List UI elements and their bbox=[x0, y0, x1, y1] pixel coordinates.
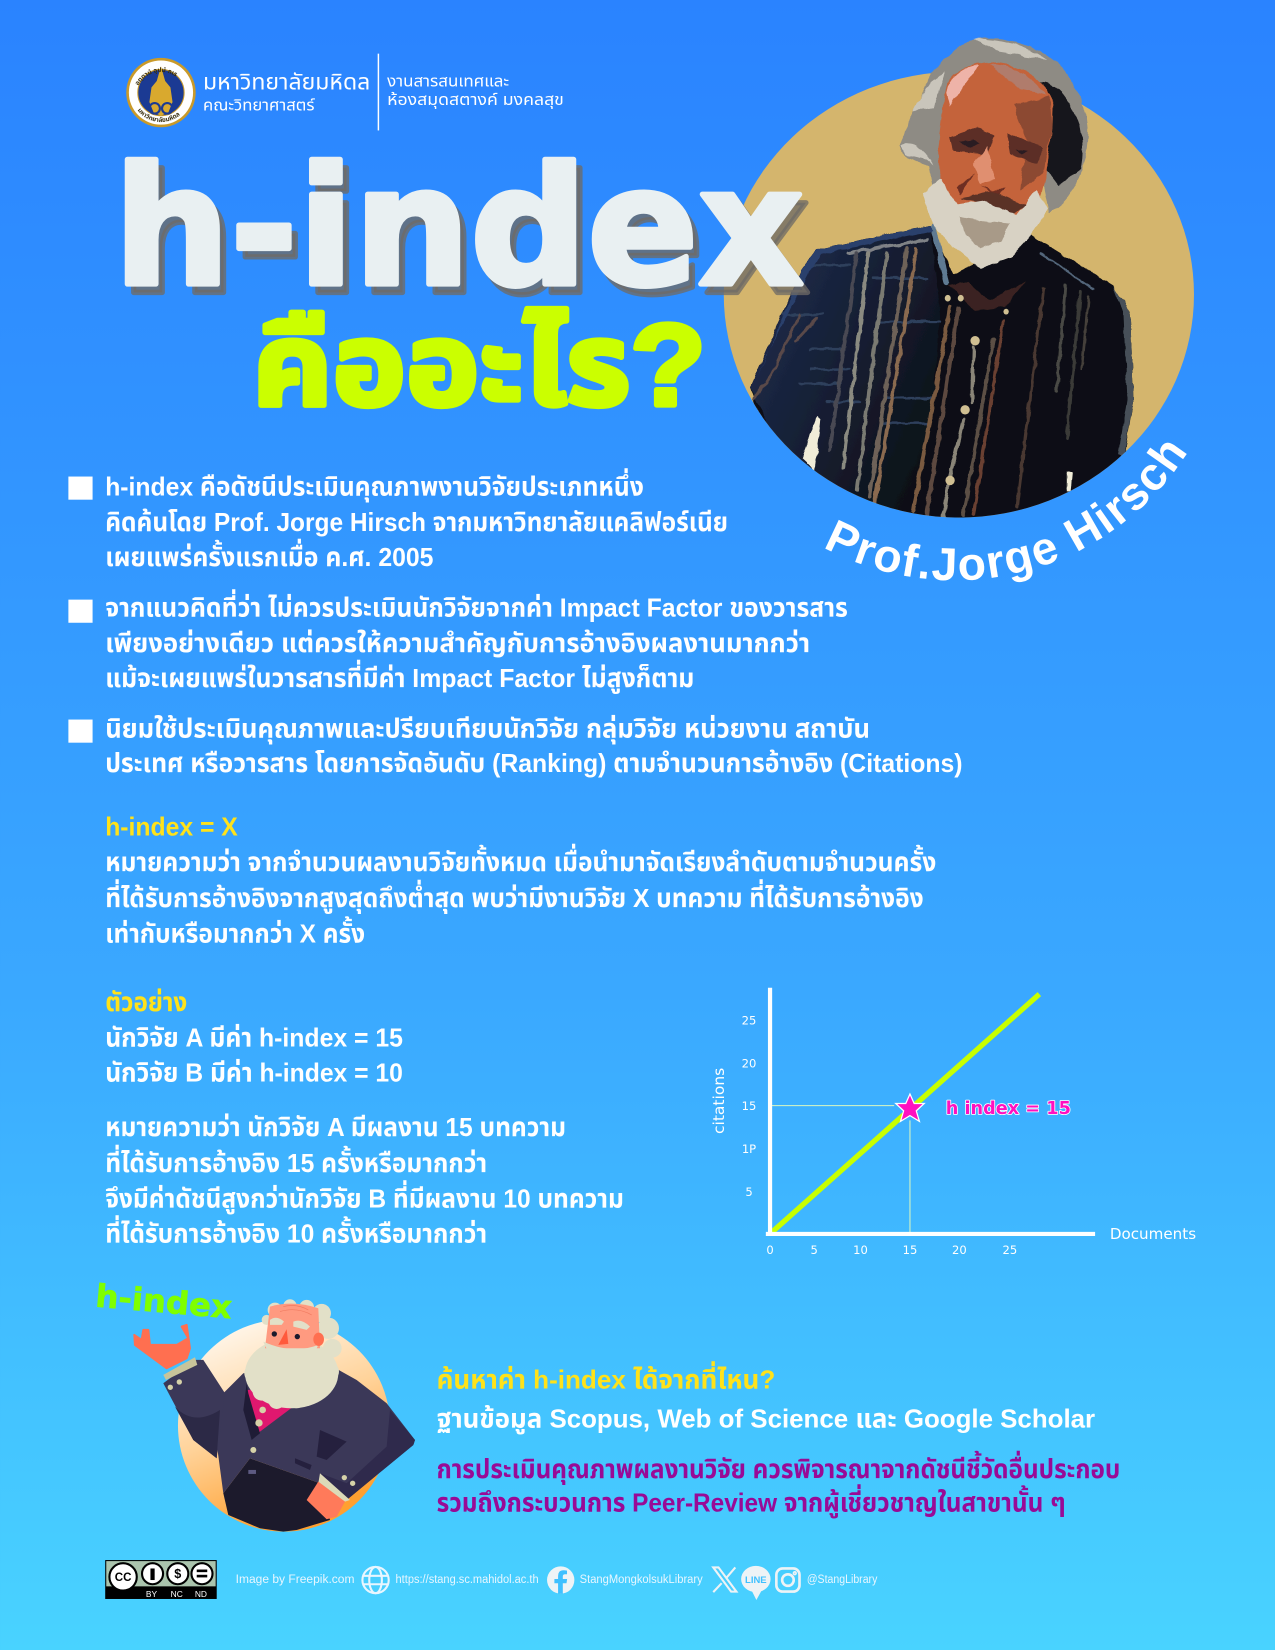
portrait circle background bbox=[724, 72, 1194, 518]
curved name: Prof.Jorge Hirsch: Prof.Jorge Hirsch bbox=[825, 442, 1187, 582]
icon: facebook bbox=[547, 1566, 574, 1594]
text block: where to find h-index bbox=[437, 1360, 1095, 1435]
icon: Instagram bbox=[776, 1568, 800, 1592]
chart: h-index line chart: 10 bbox=[853, 1243, 868, 1257]
icon: CC BY-NC-ND license: $ bbox=[174, 1567, 181, 1581]
icon: star marker bbox=[896, 1094, 924, 1121]
icon: CC BY-NC-ND license bbox=[105, 1560, 217, 1599]
text block: bullet 2 bbox=[68, 588, 848, 694]
header: library name: ห้องสมุดสตางค์ มงคลสุข bbox=[387, 92, 564, 109]
callout: evaluation note: การประเมินคุณภาพผลงานวิจัย ควรพิจารณาจากดัชนีชี้วัดอื่นประกอบ bbox=[437, 1450, 1120, 1485]
chart: h-index line chart: 5 bbox=[811, 1243, 818, 1257]
chart: h-index line chart: 15 bbox=[742, 1099, 756, 1113]
logo: Mahidol University seal: อตฺตานํ อุปมํ กเร bbox=[136, 67, 178, 85]
title: h-index: h-index bbox=[114, 132, 804, 323]
text block: where to find h-index: ค้นหาค่า h-index ได้จากที่ไหน? bbox=[437, 1360, 775, 1395]
chart: h-index line chart bbox=[711, 988, 1196, 1257]
text block: example: นักวิจัย A มีค่า h-index = 15 bbox=[105, 1023, 403, 1053]
text block: example: ที่ได้รับการอ้างอิง 10 ครั้งหรือมากกว่า bbox=[105, 1214, 487, 1248]
footer: website: https://stang.sc.mahidol.ac.th bbox=[396, 1574, 539, 1586]
header: university name bbox=[203, 69, 370, 114]
label: h-index above hand: h-index bbox=[94, 1279, 233, 1326]
callout: evaluation note: รวมถึงกระบวนการ Peer-Review จากผู้เชี่ยวชาญในสาขานั้น ๆ bbox=[437, 1484, 1066, 1519]
text block: h-index = X definition: h-index = X bbox=[105, 811, 238, 841]
callout: evaluation note bbox=[437, 1450, 1120, 1519]
chart: h-index line chart: 25 bbox=[1003, 1243, 1017, 1257]
text block: example: ตัวอย่าง bbox=[105, 987, 187, 1017]
portrait: Prof. Jorge Hirsch bbox=[750, 39, 1133, 565]
text block: h-index = X definition: หมายความว่า จากจำนวนผลงานวิจัยทั้งหมด เมื่อนำมาจัดเรียงลำดับตามจำนวนครั้ง bbox=[105, 843, 936, 877]
text block: example: จึงมีค่าดัชนีสูงกว่านักวิจัย B ที่มีผลงาน 10 บทความ bbox=[105, 1180, 624, 1215]
chart: h-index line chart: 20 bbox=[952, 1243, 967, 1257]
icon: CC BY-NC-ND license: CC bbox=[115, 1572, 132, 1584]
logo: Mahidol University seal bbox=[126, 58, 196, 128]
text block: bullet 1 bbox=[68, 467, 728, 572]
text block: example: หมายความว่า นักวิจัย A มีผลงาน 15 บทความ bbox=[105, 1112, 566, 1142]
chart: h-index line chart: 25 bbox=[742, 1014, 756, 1028]
header: library name: งานสารสนเทศและ bbox=[387, 73, 509, 90]
text block: bullet 2: จากแนวคิดที่ว่า ไม่ควรประเมินนักวิจัยจากค่า Impact Factor ของวารสาร bbox=[105, 588, 848, 622]
chart: h-index line chart: citations bbox=[711, 1068, 728, 1134]
text block: bullet 3: ประเทศ หรือวารสาร โดยการจัดอันดับ (Ranking) ตามจำนวนการอ้างอิง (Citations) bbox=[105, 748, 963, 778]
chart: h-index line chart: 0 bbox=[766, 1243, 774, 1257]
chart: h-index line chart: 5 bbox=[745, 1185, 753, 1199]
icon: CC BY-NC-ND license: ND bbox=[195, 1589, 207, 1599]
text block: example: ที่ได้รับการอ้างอิง 15 ครั้งหรือมากกว่า bbox=[105, 1144, 487, 1178]
text block: where to find h-index: ฐานข้อมูล Scopus, Web of Science และ Google Scholar bbox=[437, 1404, 1095, 1435]
icon: X bbox=[713, 1567, 736, 1592]
icon: CC BY-NC-ND license: NC bbox=[171, 1589, 183, 1599]
text block: bullet 1: คิดค้นโดย Prof. Jorge Hirsch จากมหาวิทยาลัยแคลิฟอร์เนีย bbox=[105, 507, 728, 537]
header: university name: คณะวิทยาศาสตร์ bbox=[203, 97, 315, 114]
text block: example bbox=[105, 987, 624, 1248]
text block: bullet 3 bbox=[68, 713, 963, 778]
icon: LINE: LINE bbox=[745, 1575, 767, 1586]
illustration: cartoon professor bbox=[134, 1299, 415, 1532]
header: university name: มหาวิทยาลัยมหิดล bbox=[203, 69, 370, 94]
icon: LINE bbox=[741, 1566, 771, 1600]
title: h-index: h-index bbox=[120, 140, 810, 331]
chart: h-index line chart: Documents bbox=[1110, 1226, 1196, 1243]
text block: example: นักวิจัย B มีค่า h-index = 10 bbox=[105, 1057, 403, 1087]
chart: h-index line chart: h index = 15 bbox=[946, 1098, 1071, 1119]
footer: instagram handle: @StangLibrary bbox=[807, 1574, 878, 1586]
icon: globe bbox=[362, 1567, 389, 1593]
text block: h-index = X definition: เท่ากับหรือมากกว่า X ครั้ง bbox=[105, 915, 365, 949]
footer: facebook name: StangMongkolsukLibrary bbox=[580, 1574, 703, 1586]
text block: bullet 3: นิยมใช้ประเมินคุณภาพและปรียบเทียบนักวิจัย กลุ่มวิจัย หน่วยงาน สถาบัน bbox=[105, 713, 870, 744]
text block: bullet 1: เผยแพร่ครั้งแรกเมื่อ ค.ศ. 2005 bbox=[105, 538, 433, 572]
chart: h-index line chart: 1P bbox=[742, 1142, 756, 1156]
header: library name bbox=[387, 73, 564, 109]
icon: CC BY-NC-ND license: BY bbox=[146, 1589, 157, 1599]
text block: h-index = X definition bbox=[105, 811, 936, 949]
footer: image credit: Image by Freepik.com bbox=[236, 1574, 355, 1586]
chart: h-index line chart: 20 bbox=[742, 1057, 756, 1071]
text block: bullet 2: เพียงอย่างเดียว แต่ควรให้ความสำคัญกับการอ้างอิงผลงานมากกว่า bbox=[105, 628, 810, 658]
text block: bullet 2: แม้จะเผยแพร่ในวารสารที่มีค่า Impact Factor ไม่สูงก็ตาม bbox=[105, 659, 694, 694]
chart: h-index line chart: 15 bbox=[903, 1243, 917, 1257]
text block: h-index = X definition: ที่ได้รับการอ้างอิงจากสูงสุดถึงต่ำสุด พบว่ามีงานวิจัย X บทความ ที่ได้รับการอ้างอิง bbox=[105, 879, 924, 914]
title: Thai subtitle: คืออะไร? bbox=[252, 300, 706, 430]
logo: Mahidol University seal: มหาวิทยาลัยมหิดล bbox=[138, 108, 180, 122]
text block: bullet 1: h-index คือดัชนีประเมินคุณภาพงานวิจัยประเภทหนึ่ง bbox=[105, 467, 644, 502]
